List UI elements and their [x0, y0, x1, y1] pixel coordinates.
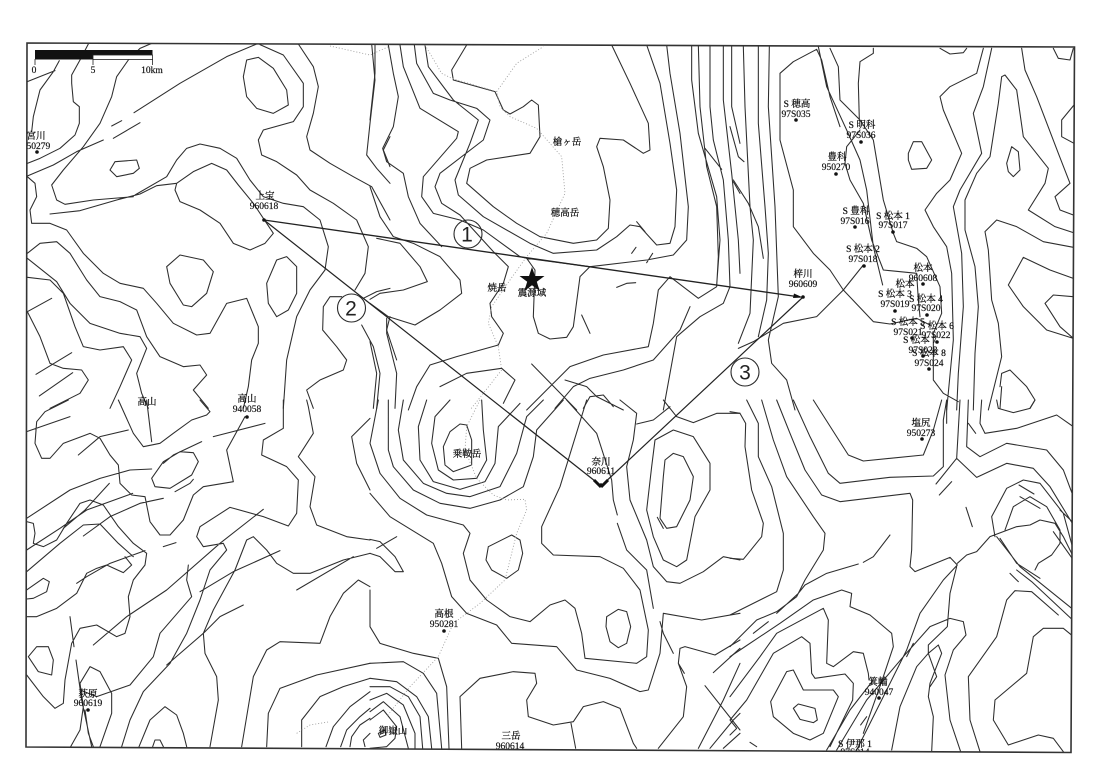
station labels: east: 97S014: [840, 748, 870, 758]
station labels: centre: [430, 456, 615, 752]
station labels: east: 松本: [895, 278, 915, 290]
contour lines: south-east: [730, 400, 1073, 752]
station labels: centre: 高根: [434, 608, 454, 620]
station labels: east: 950270: [822, 163, 850, 173]
station labels: centre: 950281: [430, 620, 458, 630]
station labels: east: S 松本 3: [878, 288, 912, 300]
scale bar: [32, 50, 163, 76]
station labels: east: S 松本 8: [912, 347, 946, 359]
station labels: east: S 穂高: [784, 98, 811, 110]
station labels: west: 宮川: [26, 130, 46, 142]
station labels: east: 97S023: [908, 346, 938, 356]
contour lines: north-centre: [370, 45, 740, 410]
station dots: [35, 118, 939, 712]
station labels: east: S 伊那 1: [838, 738, 872, 750]
station labels: east: 97S024: [914, 359, 944, 369]
station labels: west: 荻原: [78, 688, 98, 700]
mountain and place labels: 槍ヶ岳: [553, 136, 582, 148]
station labels: east: S 松本 6: [920, 320, 954, 332]
station labels: centre: 960614: [496, 742, 524, 752]
contour lines: south-west: [27, 400, 370, 747]
label: epicentre area: 震源域: [518, 287, 547, 299]
station labels: east: 97S019: [880, 300, 910, 310]
station labels: east: S 松本 2: [846, 243, 880, 255]
station labels: east: S 松本 4: [909, 293, 943, 305]
path number 3: [731, 358, 759, 386]
epicentre star: [520, 267, 544, 291]
wave path 2: 上宝 to 奈川: [264, 220, 601, 487]
station labels: centre: 960611: [587, 467, 615, 477]
station labels: east: 960608: [909, 274, 938, 284]
mountain and place labels: 御嶽山: [379, 725, 407, 737]
contour lines: north-west: [27, 43, 397, 408]
mountain and place labels: 焼岳: [487, 282, 507, 294]
station labels: east: 97S018: [848, 255, 878, 265]
wave path 3: 梓川 to 奈川: [601, 298, 802, 487]
station labels: east: 97S020: [911, 304, 941, 314]
station labels: east: 豊科: [827, 151, 847, 163]
wave path 1: 上宝 to 梓川: [264, 220, 803, 298]
scale labels: 5: [91, 66, 96, 76]
scale labels: 0: [32, 66, 37, 76]
scale labels: 10km: [141, 66, 163, 76]
station labels: east: 97S017: [878, 221, 908, 231]
mountain and place labels: 乗鞍岳: [453, 448, 482, 460]
station labels: centre: 三岳: [501, 731, 521, 742]
path number 1: [454, 220, 482, 248]
station labels: west: 高山: [237, 393, 257, 405]
station labels: east: S 明科: [849, 119, 876, 131]
scale labels: [32, 66, 163, 76]
station labels: east: 97S036: [846, 131, 876, 141]
station labels: east: 梓川: [793, 268, 813, 280]
station labels: east: 松本: [913, 262, 933, 274]
station labels: east: S 豊科: [843, 205, 870, 217]
station labels: east: 箕輪: [868, 676, 888, 688]
station labels: west: 960618: [250, 202, 278, 212]
mountain and place labels: 穂高岳: [551, 207, 580, 219]
station labels: west: 940058: [233, 405, 262, 415]
station labels: east: 塩尻: [911, 417, 931, 429]
mountain and place labels: [137, 136, 582, 737]
station labels: west: 950279: [22, 142, 50, 152]
mountain and place labels: 高山: [137, 396, 157, 408]
path number 2: [338, 294, 366, 322]
station labels: east: 97S016: [840, 217, 870, 227]
station labels: west: [22, 130, 278, 709]
station labels: east: 940047: [865, 688, 894, 698]
station labels: east: 97S035: [781, 110, 811, 120]
station labels: centre: 奈川: [591, 456, 611, 468]
station labels: east: 950273: [907, 429, 936, 439]
station labels: east: 97S022: [921, 331, 951, 341]
path number 3: 3: [739, 362, 751, 384]
station labels: east: S 松本 5: [891, 316, 925, 328]
station labels: east: S 松本 1: [876, 210, 910, 222]
station labels: west: 960619: [74, 699, 102, 709]
path number 2: 2: [345, 298, 357, 320]
path number 1: 1: [461, 224, 473, 246]
contour lines: south-centre: [370, 400, 740, 748]
station labels: east: 960609: [789, 280, 818, 290]
station labels: east: [781, 98, 954, 758]
station labels: west: 上宝: [255, 190, 275, 202]
station labels: east: S 松本 7: [903, 334, 937, 346]
station labels: east: 97S021: [893, 328, 923, 338]
contour lines: north-east: [730, 47, 1074, 410]
